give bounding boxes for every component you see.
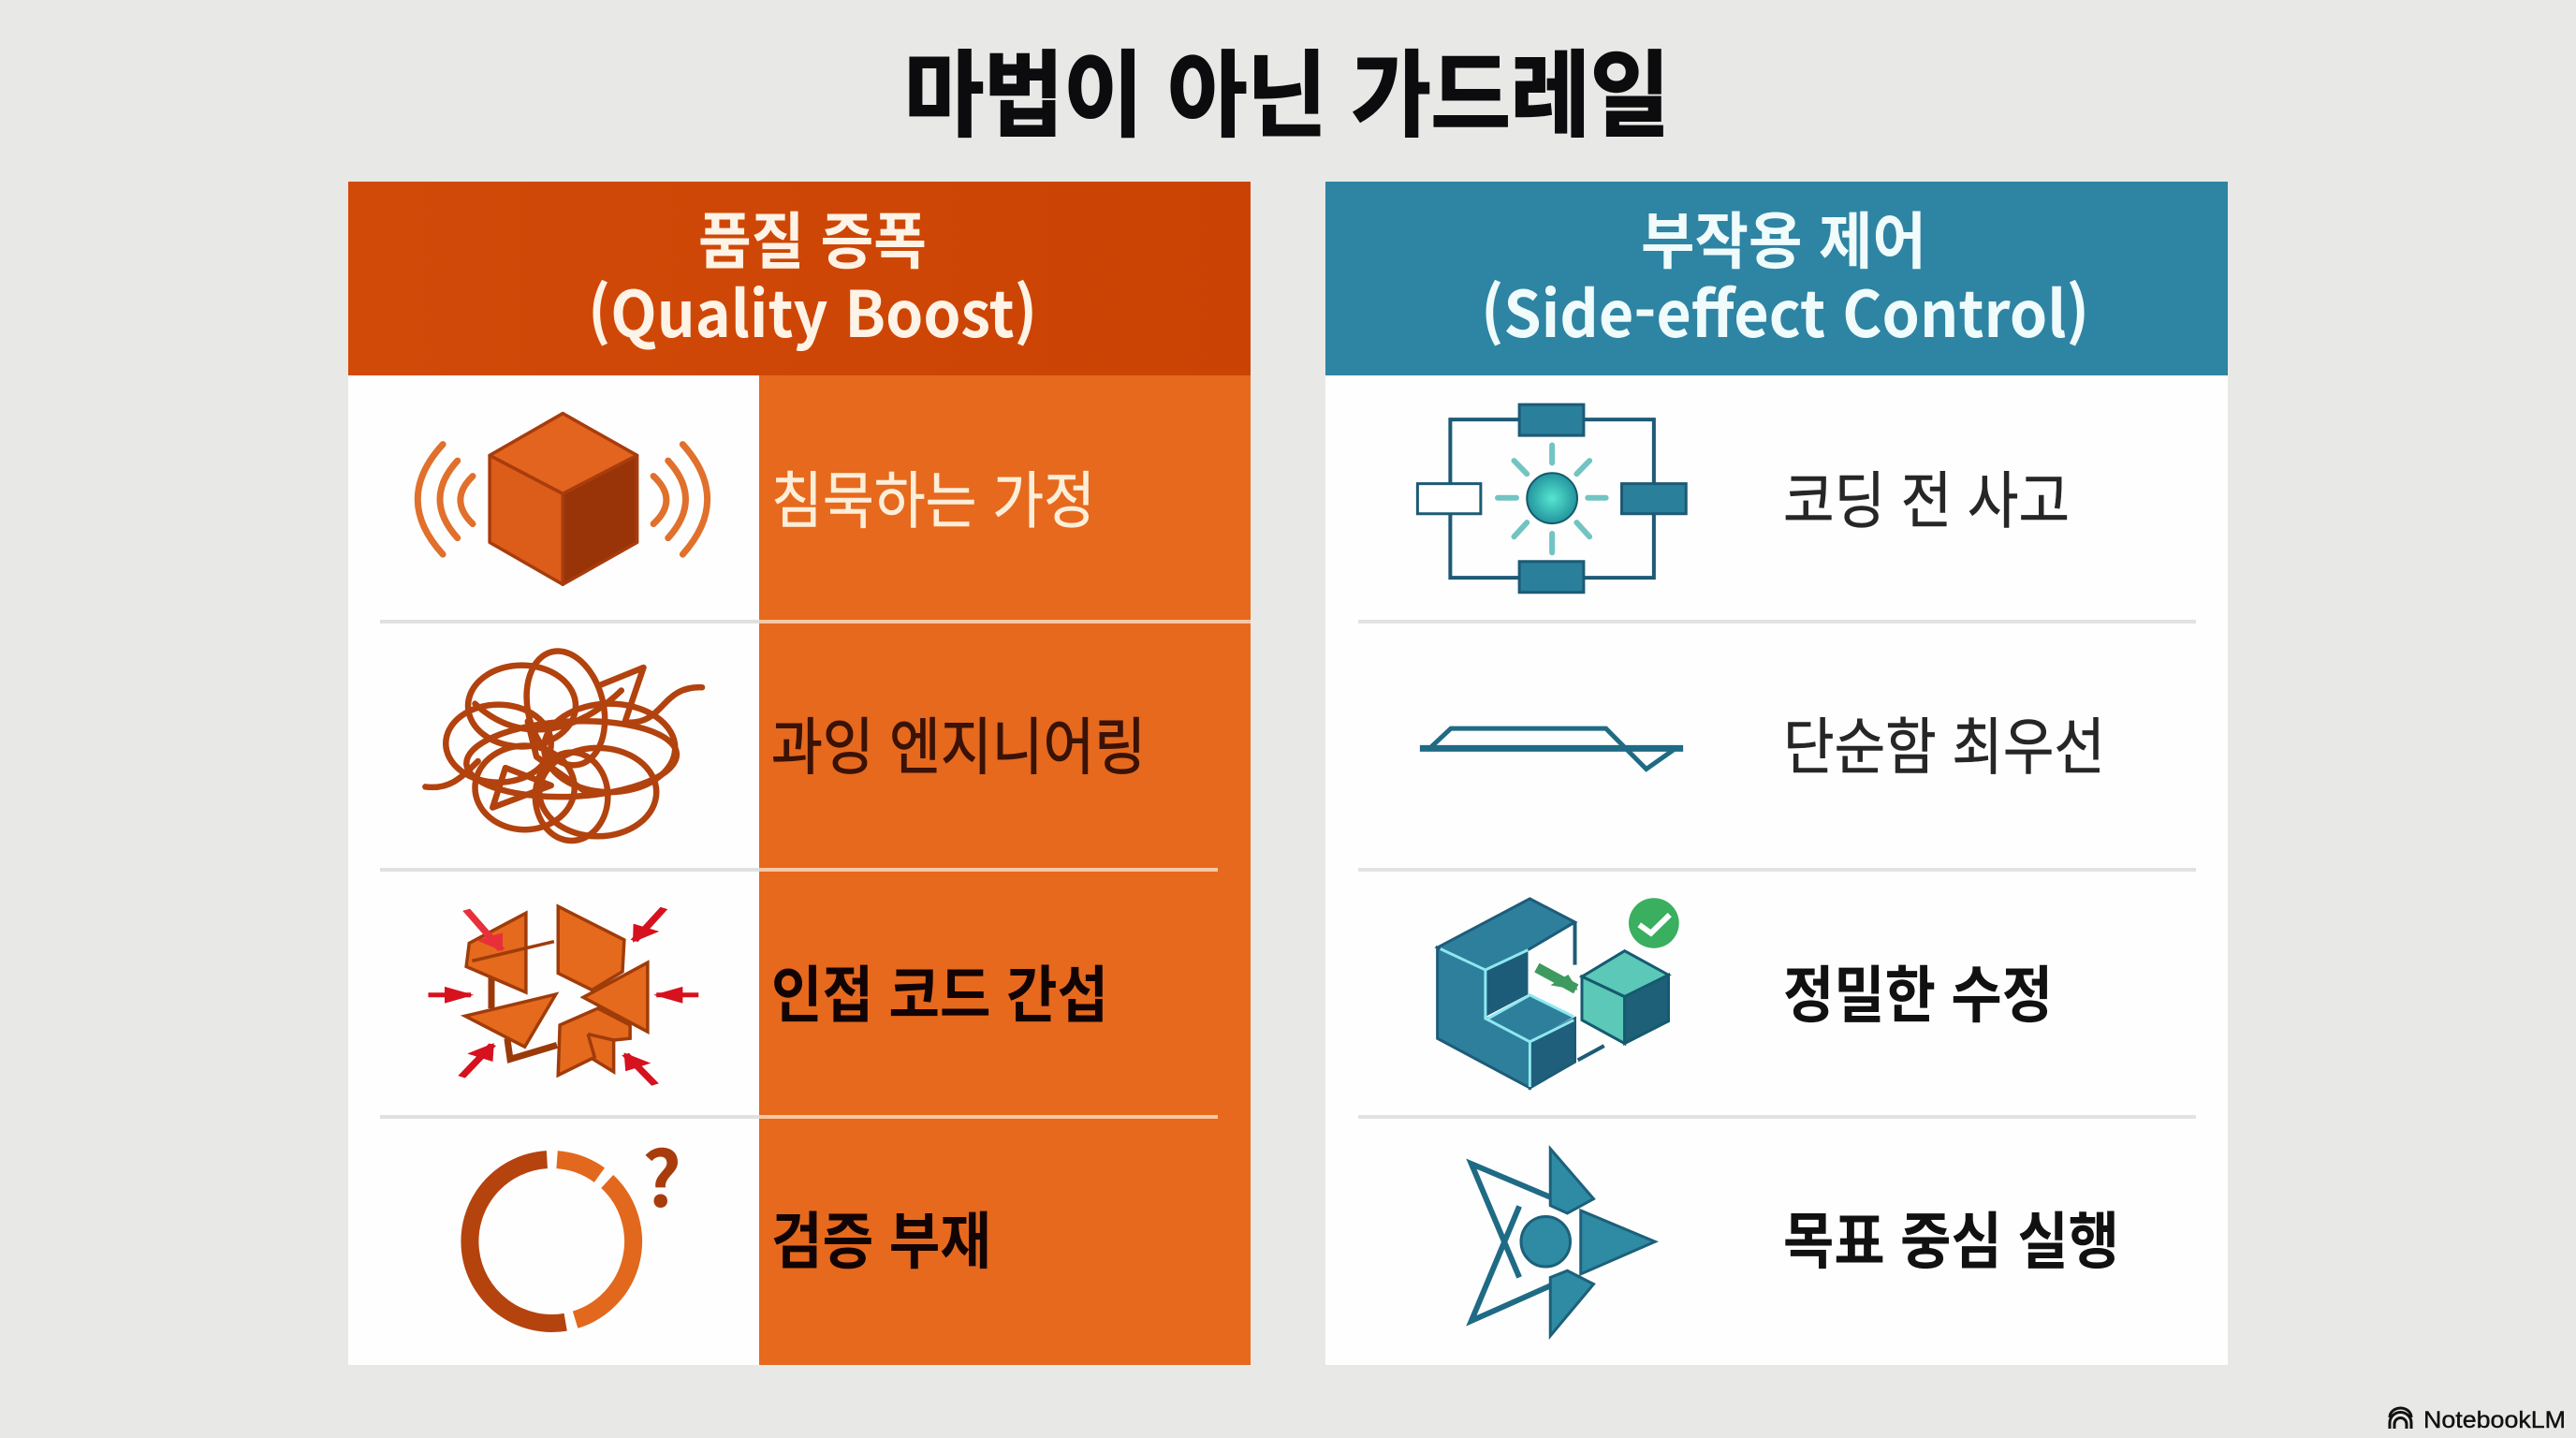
row: over-engineering <box>425 647 1146 841</box>
panel: quality boost <box>348 182 1251 1365</box>
icon: broken ring with question mark <box>470 1118 681 1323</box>
row: precise modification <box>1438 898 2053 1088</box>
panel header: side-effect control <box>1325 182 2228 375</box>
label: 코딩 전 사고 <box>1783 451 2070 541</box>
icon: converging arrows on target <box>1471 1149 1655 1336</box>
label: 과잉 엔지니어링 <box>771 697 1146 787</box>
panel header: side-effect control: 부작용 제어 <box>1641 192 1926 282</box>
icon: broken ring with question mark: ? <box>642 1118 681 1229</box>
panel: side-effect control <box>1325 182 2228 1365</box>
icon: vibrating cube <box>417 414 708 584</box>
label: 목표 중심 실행 <box>1783 1192 2119 1282</box>
row: missing verification <box>470 1118 991 1323</box>
row: goal-driven execution <box>1471 1149 2119 1336</box>
icon: colliding shards with red arrows <box>429 906 698 1084</box>
label: 침묵하는 가정 <box>771 451 1095 541</box>
row: simplicity first <box>1420 697 2105 787</box>
title: 마법이 아닌 가드레일 <box>904 20 1670 155</box>
orange label column <box>759 375 1251 1365</box>
icon: isometric block with fitting piece <box>1438 898 1679 1088</box>
label: 정밀한 수정 <box>1783 946 2053 1035</box>
panel header: side-effect control: (Side-effect Control) <box>1481 263 2089 356</box>
icon: simple line <box>1420 728 1683 770</box>
panel header: quality boost: 품질 증폭 <box>698 192 927 282</box>
label: 검증 부재 <box>771 1192 991 1282</box>
row: think before coding <box>1417 404 2070 593</box>
watermark: NotebookLM: NotebookLM <box>2423 1407 2566 1433</box>
icon: tangled line <box>425 647 702 841</box>
icon: NotebookLM logo <box>2390 1408 2411 1429</box>
row: silent assumptions <box>417 414 1095 584</box>
label: 인접 코드 간섭 <box>771 946 1108 1035</box>
panel header: quality boost: (Quality Boost) <box>588 263 1037 356</box>
panel header: quality boost <box>348 182 1251 375</box>
label: 단순함 최우선 <box>1783 697 2105 787</box>
icon: circuit with glowing core <box>1417 404 1686 593</box>
row: adjacent code interference <box>429 906 1108 1084</box>
